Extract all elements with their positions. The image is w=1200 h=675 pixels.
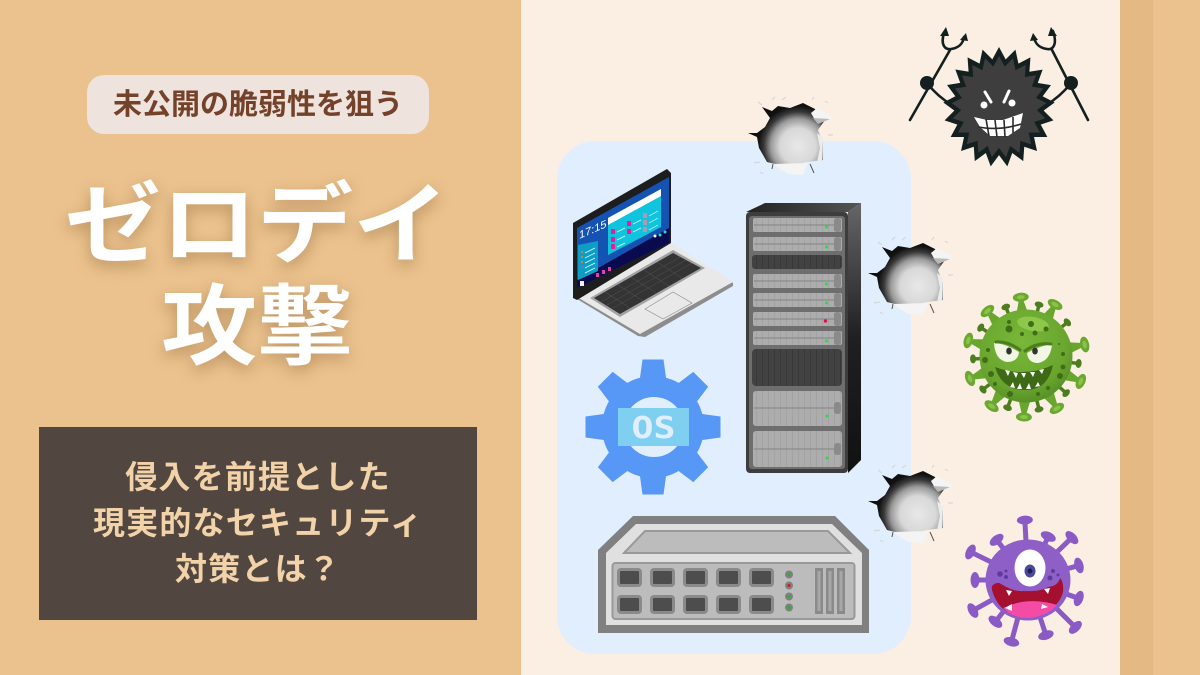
panel: dark question box: 対策とは？ xyxy=(175,551,341,587)
server units xyxy=(752,218,842,467)
panel: blue system area xyxy=(557,141,911,654)
panel: dark question box: 侵入を前提とした xyxy=(125,459,391,495)
cheek freckles xyxy=(997,569,1060,580)
icon: black virus with forks xyxy=(910,27,1088,171)
icon: network switch xyxy=(598,516,869,633)
icon: wall hole middle xyxy=(868,237,953,315)
title xyxy=(65,176,449,377)
virus spiked body xyxy=(943,28,1073,171)
title: ゼロデイ xyxy=(65,176,449,275)
switch slots xyxy=(815,568,845,614)
virus spots xyxy=(982,320,1066,397)
badge: subtitle pill xyxy=(87,75,429,134)
large spikes xyxy=(962,292,1091,422)
small spikes xyxy=(970,301,1082,413)
title: 攻撃 xyxy=(161,278,353,377)
icon: laptop xyxy=(573,169,733,337)
badge: subtitle pill: 未公開の脆弱性を狙う xyxy=(113,89,403,121)
panel: dark question box xyxy=(39,427,477,620)
virus angry face xyxy=(974,91,1023,137)
virus eyes xyxy=(994,342,1052,363)
eye xyxy=(1014,550,1046,586)
arms and forks xyxy=(910,31,1088,120)
body xyxy=(986,540,1070,620)
icon: server rack xyxy=(746,203,861,473)
panel: right cream background xyxy=(521,0,1120,675)
right edge strip xyxy=(1120,0,1153,675)
spikes xyxy=(963,515,1086,648)
icon: purple one-eyed virus xyxy=(963,515,1086,648)
icon: laptop: 17:15 xyxy=(579,219,607,242)
icon: wall hole top xyxy=(748,97,833,175)
icon: OS gear: OS xyxy=(632,411,676,446)
icon: wall hole bottom xyxy=(868,465,953,543)
panel: dark question box: 現実的なセキュリティ xyxy=(93,505,423,541)
icon: green virus xyxy=(962,292,1091,422)
virus mouth xyxy=(995,365,1053,390)
icon: OS gear xyxy=(586,360,720,494)
virus body xyxy=(980,310,1072,402)
switch ports xyxy=(617,568,774,614)
switch LEDs xyxy=(785,570,793,612)
mouth xyxy=(992,578,1063,618)
